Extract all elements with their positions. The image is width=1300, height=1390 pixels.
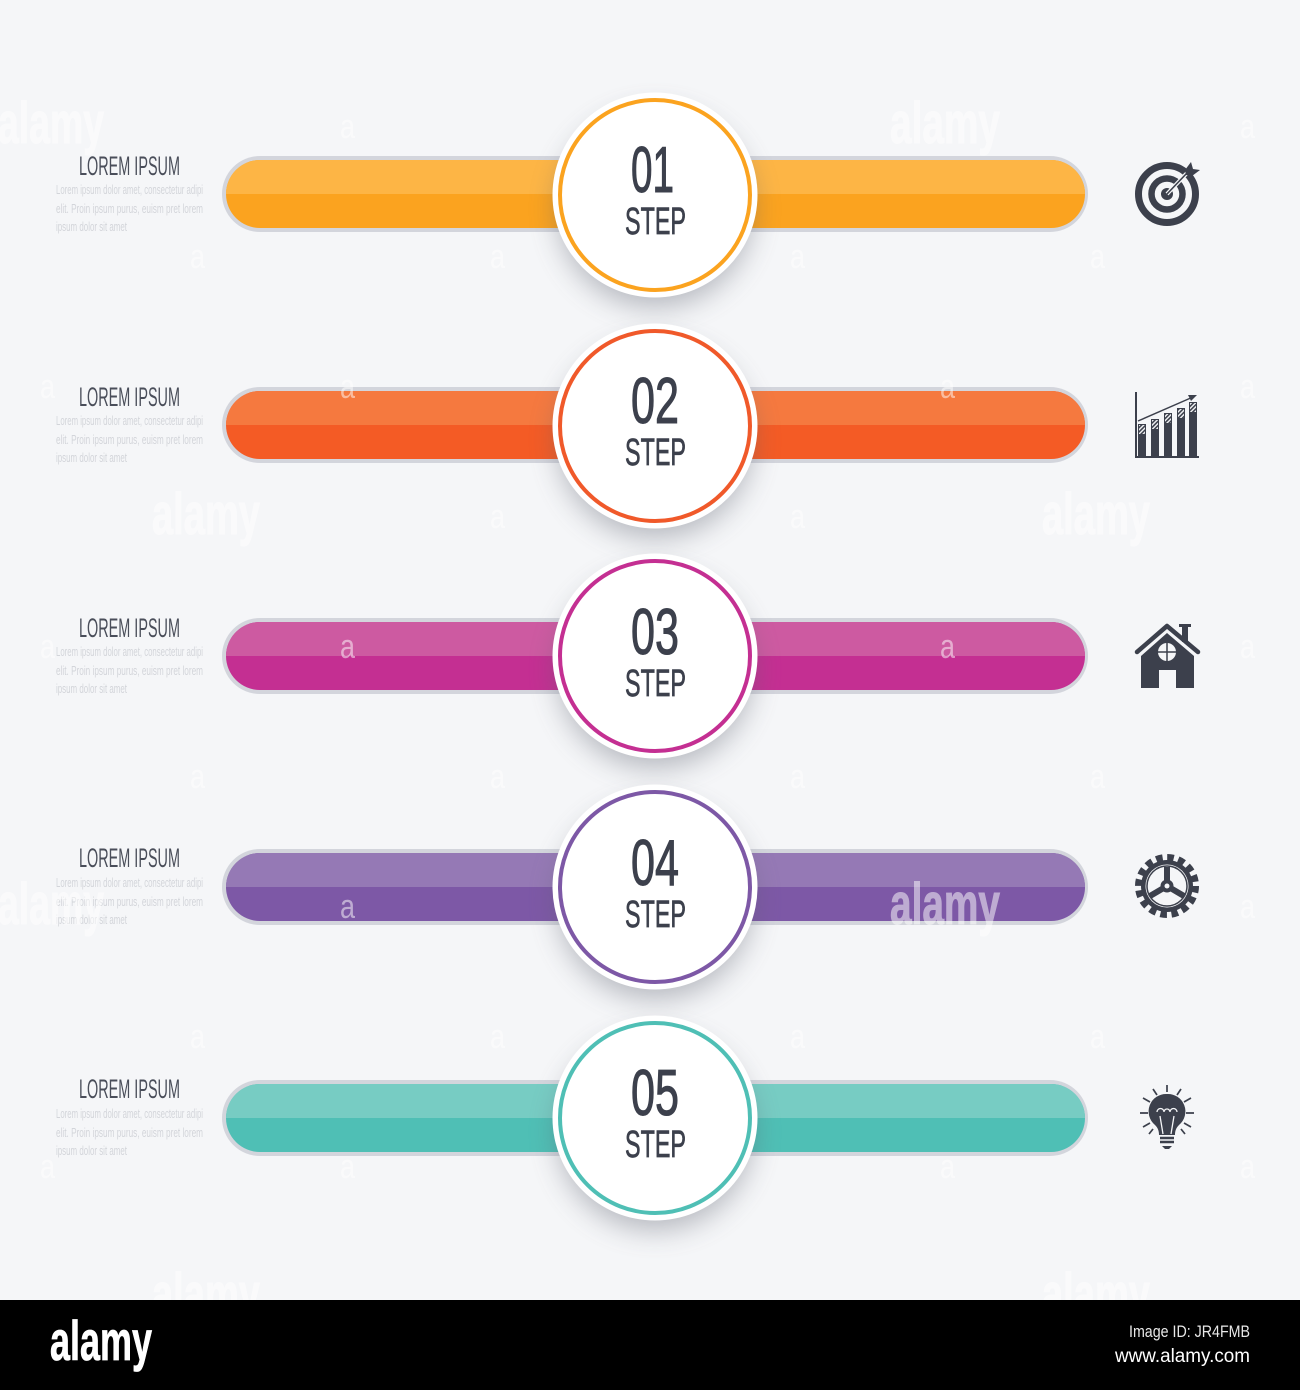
watermarks: alamy — [0, 872, 104, 937]
small watermark letters: a — [490, 498, 505, 536]
small watermark letters: a — [1240, 888, 1255, 926]
small watermark letters: a — [40, 368, 55, 406]
small watermark letters: a — [940, 1148, 955, 1186]
circle 01 — [552, 92, 758, 307]
text block 01 — [56, 151, 203, 234]
text block 01: elit. Proin ipsum purus, euism pret lorem — [56, 201, 203, 216]
row 2: step 02 — [56, 324, 1199, 538]
text block 05: Lorem ipsum dolor amet, consectetur adipi — [56, 1106, 203, 1121]
icon: house — [1137, 624, 1198, 688]
small watermark letters: a — [340, 1148, 355, 1186]
small watermark letters: a — [1240, 108, 1255, 146]
small watermark letters: a — [790, 498, 805, 536]
text block 05 — [56, 1074, 203, 1158]
text block 04: LOREM IPSUM — [79, 843, 180, 873]
footer bar: Image ID: JR4FMB — [1129, 1322, 1250, 1341]
bar 03 — [222, 618, 1088, 694]
watermarks — [0, 91, 1150, 1327]
watermarks: alamy — [1042, 482, 1150, 547]
watermarks: alamy — [152, 482, 260, 547]
small watermark letters: a — [340, 368, 355, 406]
bar 04 — [222, 849, 1088, 925]
small watermark letters: a — [1090, 758, 1105, 796]
watermarks: alamy — [152, 1262, 260, 1327]
small watermark letters: a — [190, 238, 205, 276]
small watermark letters: a — [1240, 1148, 1255, 1186]
text block 04: ipsum dolor sit amet — [56, 912, 127, 927]
icon: light bulb — [1140, 1085, 1194, 1149]
watermarks: alamy — [0, 91, 104, 156]
text block 01: LOREM IPSUM — [79, 151, 180, 181]
text block 02 — [56, 382, 203, 465]
small watermark letters: a — [940, 628, 955, 666]
circle 04: 04 — [631, 826, 679, 899]
text block 05: elit. Proin ipsum purus, euism pret lorem — [56, 1125, 203, 1140]
text block 02: elit. Proin ipsum purus, euism pret lorem — [56, 432, 203, 447]
watermarks: alamy — [890, 91, 1000, 156]
small watermark letters: a — [490, 238, 505, 276]
circle 05: STEP — [625, 1124, 686, 1166]
circle 05: 05 — [631, 1056, 679, 1129]
watermarks: alamy — [1042, 1262, 1150, 1327]
text block 01: ipsum dolor sit amet — [56, 219, 127, 234]
row 1: step 01 — [56, 92, 1200, 307]
small watermark letters: a — [490, 758, 505, 796]
text block 05: ipsum dolor sit amet — [56, 1143, 127, 1158]
bar 01 — [222, 156, 1088, 232]
circle 03: 03 — [631, 595, 679, 668]
small watermark letters: a — [40, 1148, 55, 1186]
row 5: step 05 — [56, 1016, 1194, 1230]
circle 02 — [552, 324, 758, 538]
small watermark letters: a — [40, 628, 55, 666]
small watermark letters: a — [340, 108, 355, 146]
text block 04 — [56, 843, 203, 927]
small watermark letters: a — [790, 1018, 805, 1056]
small watermark letters: a — [790, 238, 805, 276]
text block 04: elit. Proin ipsum purus, euism pret lorem — [56, 894, 203, 909]
circle 02: 02 — [631, 364, 679, 437]
footer bar: alamy — [50, 1309, 152, 1372]
watermarks: alamy — [890, 872, 1000, 937]
circle 03: STEP — [625, 663, 686, 705]
icon: bar chart with arrow — [1135, 392, 1199, 458]
circle 04: STEP — [625, 894, 686, 936]
footer bar: www.alamy.com — [1114, 1346, 1250, 1367]
small watermark letters — [40, 108, 1255, 1186]
text block 01: Lorem ipsum dolor amet, consectetur adipi — [56, 182, 203, 197]
bar 02 — [222, 387, 1088, 463]
circle 01: STEP — [625, 201, 686, 243]
text block 02: Lorem ipsum dolor amet, consectetur adipi — [56, 413, 203, 428]
small watermark letters: a — [340, 888, 355, 926]
text block 03: ipsum dolor sit amet — [56, 681, 127, 696]
text block 03: LOREM IPSUM — [79, 613, 180, 643]
circle 02: STEP — [625, 432, 686, 474]
bar 05 — [222, 1080, 1088, 1156]
icon: gear — [1139, 858, 1195, 914]
small watermark letters: a — [340, 628, 355, 666]
text block 04: Lorem ipsum dolor amet, consectetur adipi — [56, 875, 203, 890]
circle 03 — [552, 554, 758, 768]
text block 03: elit. Proin ipsum purus, euism pret lorem — [56, 663, 203, 678]
circle 05 — [552, 1016, 758, 1230]
small watermark letters: a — [190, 1018, 205, 1056]
small watermark letters: a — [490, 1018, 505, 1056]
text block 03 — [56, 613, 203, 696]
circle 01: 01 — [631, 133, 674, 206]
text block 02: ipsum dolor sit amet — [56, 450, 127, 465]
small watermark letters: a — [1090, 1018, 1105, 1056]
text block 05: LOREM IPSUM — [79, 1074, 180, 1104]
small watermark letters: a — [190, 758, 205, 796]
small watermark letters: a — [790, 758, 805, 796]
circle 04 — [552, 784, 758, 999]
small watermark letters: a — [1240, 368, 1255, 406]
text block 02: LOREM IPSUM — [79, 382, 180, 412]
icon: target with arrow — [1138, 162, 1200, 222]
footer bar — [0, 1300, 1300, 1390]
small watermark letters: a — [1090, 238, 1105, 276]
small watermark letters: a — [1240, 628, 1255, 666]
row 4: step 04 — [56, 784, 1195, 999]
text block 03: Lorem ipsum dolor amet, consectetur adipi — [56, 644, 203, 659]
row 3: step 03 — [56, 554, 1198, 768]
small watermark letters: a — [940, 368, 955, 406]
